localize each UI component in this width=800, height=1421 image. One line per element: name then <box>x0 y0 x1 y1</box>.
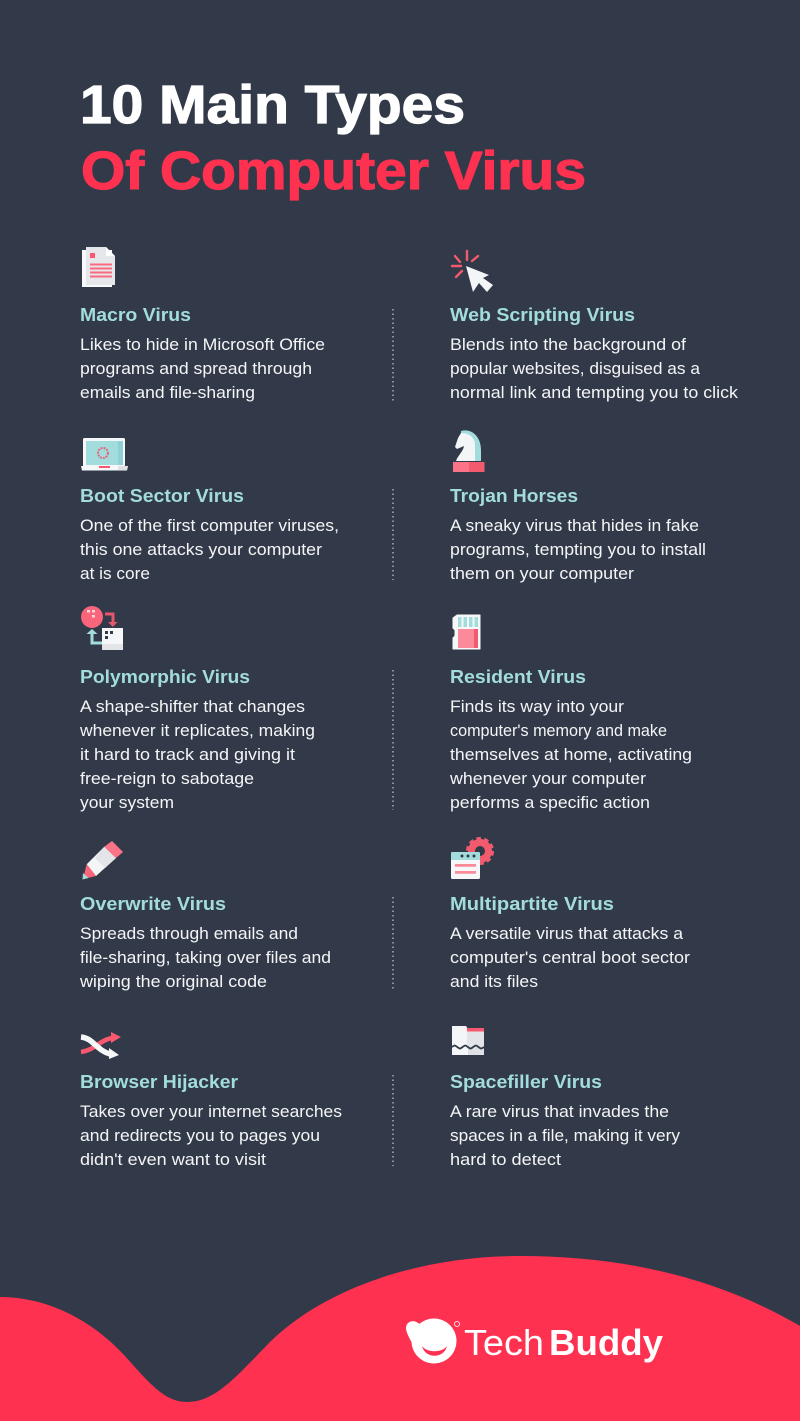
logo: TechBuddy: Tech <box>464 1322 544 1363</box>
heading: Spacefiller Virus <box>450 1072 602 1092</box>
panel: browser hijacker <box>80 1032 342 1169</box>
text block: Spreads through emails and <box>80 924 298 943</box>
text block <box>80 335 325 402</box>
footer wave <box>0 1256 800 1421</box>
text block <box>79 697 315 812</box>
panel: overwrite virus <box>79 841 331 991</box>
heading: Macro Virus <box>80 305 191 325</box>
icon: window and gear <box>451 838 492 879</box>
heading: Overwrite Virus <box>80 894 226 914</box>
text block <box>450 335 739 402</box>
title: Of Computer Virus <box>81 141 586 201</box>
title: 10 Main Types <box>80 75 465 135</box>
text block <box>450 1102 681 1169</box>
panel: macro virus <box>80 247 325 402</box>
text block: didn't even want to visit <box>80 1150 266 1169</box>
text block: whenever your computer <box>449 769 646 788</box>
text block: emails and file-sharing <box>80 383 255 402</box>
icon: logo face <box>406 1318 460 1364</box>
icon: memory card <box>453 615 480 649</box>
text block <box>80 516 339 583</box>
text block: Finds its way into your <box>450 697 624 716</box>
text block: free-reign to sabotage <box>80 769 254 788</box>
icon: shape shift <box>81 606 123 650</box>
title <box>80 75 586 201</box>
text block <box>450 516 706 583</box>
text block: performs a specific action <box>450 793 650 812</box>
icon: chess knight <box>453 430 484 472</box>
panel: trojan horses <box>450 430 706 583</box>
text block: whenever it replicates, making <box>79 721 315 740</box>
icon: pencil <box>82 841 123 880</box>
panel: spacefiller virus <box>450 1026 681 1169</box>
panel: polymorphic virus <box>79 606 315 812</box>
text block: themselves at home, activating <box>450 745 692 764</box>
logo: TechBuddy <box>406 1318 663 1364</box>
heading: Browser Hijacker <box>80 1072 238 1092</box>
text block: computer's memory and make <box>450 721 667 740</box>
panel: web scripting virus <box>450 251 739 402</box>
panel: multipartite virus <box>450 838 690 991</box>
text block: programs and spread through <box>80 359 312 378</box>
text block: wiping the original code <box>79 972 267 991</box>
heading: Boot Sector Virus <box>80 486 244 506</box>
text block: at is core <box>80 564 150 583</box>
text block: normal link and tempting you to click <box>450 383 739 402</box>
text block: file-sharing, taking over files and <box>80 948 331 967</box>
icon: torn file <box>452 1026 484 1055</box>
heading: Web Scripting Virus <box>450 305 635 325</box>
logo: TechBuddy: Buddy <box>549 1322 663 1363</box>
heading: Trojan Horses <box>450 486 578 506</box>
text block: them on your computer <box>450 564 634 583</box>
text block: One of the first computer viruses, <box>80 516 339 535</box>
text block <box>80 1102 342 1169</box>
text block: A shape-shifter that changes <box>80 697 305 716</box>
panel: resident virus <box>449 615 692 812</box>
icon: document <box>82 247 115 287</box>
text block: this one attacks your computer <box>80 540 322 559</box>
text block: popular websites, disguised as a <box>450 359 701 378</box>
heading: Polymorphic Virus <box>80 667 250 687</box>
text block: A sneaky virus that hides in fake <box>450 516 699 535</box>
text block <box>450 924 690 991</box>
text block: Takes over your internet searches <box>80 1102 342 1121</box>
text block: computer's central boot sector <box>450 948 690 967</box>
text block: A rare virus that invades the <box>450 1102 669 1121</box>
text block: Likes to hide in Microsoft Office <box>80 335 325 354</box>
heading: Resident Virus <box>450 667 586 687</box>
icon: crossing arrows <box>81 1032 121 1059</box>
text block: A versatile virus that attacks a <box>450 924 684 943</box>
text block <box>79 924 331 991</box>
text block: your system <box>80 793 174 812</box>
heading: Multipartite Virus <box>450 894 614 914</box>
text block <box>449 697 692 812</box>
text block: spaces in a file, making it very <box>450 1126 681 1145</box>
text block: Blends into the background of <box>450 335 686 354</box>
text block: programs, tempting you to install <box>450 540 706 559</box>
text block: and its files <box>450 972 538 991</box>
icon: cursor click <box>452 251 493 292</box>
text block: hard to detect <box>450 1150 561 1169</box>
text block: and redirects you to pages you <box>80 1126 320 1145</box>
panel: boot sector virus <box>80 438 339 583</box>
text block: it hard to track and giving it <box>80 745 295 764</box>
icon: laptop <box>81 438 128 470</box>
